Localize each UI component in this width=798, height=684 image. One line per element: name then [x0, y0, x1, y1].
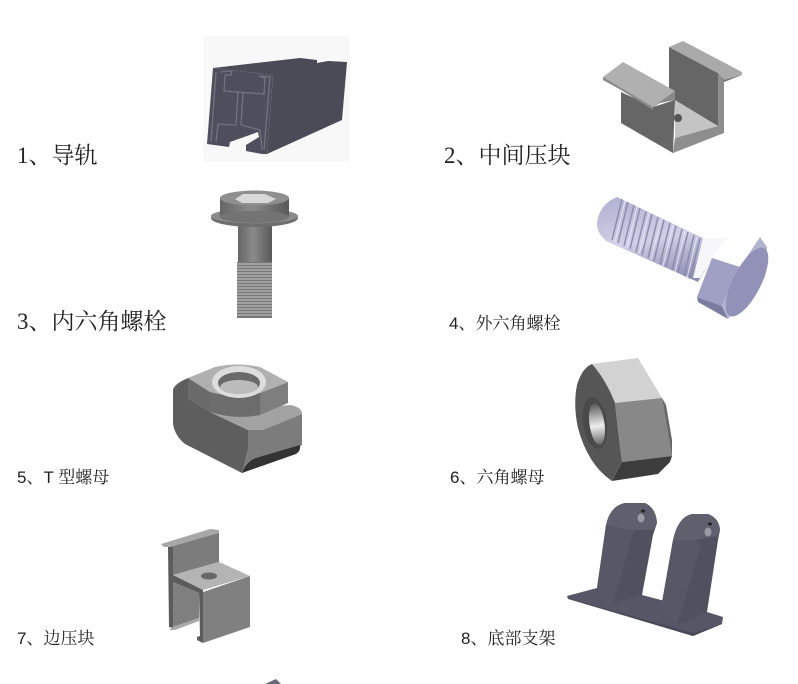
part image: cropped part at page bottom	[265, 679, 281, 684]
part image: rail	[203, 36, 350, 162]
label: 4 hex bolt: 4、外六角螺栓	[449, 314, 560, 333]
part image: hex bolt	[597, 197, 777, 322]
part image: edge clamp	[161, 529, 250, 643]
label: 8 bottom bracket: 8、底部支架	[461, 629, 555, 648]
part image: middle clamp	[603, 41, 742, 153]
label: 3 hex socket bolt: 3、内六角螺栓	[17, 309, 166, 334]
label: 7 edge clamp: 7、边压块	[17, 629, 94, 648]
label: 6 hex nut: 6、六角螺母	[450, 468, 544, 487]
part image: T nut	[173, 364, 302, 473]
label: 2 middle clamp: 2、中间压块	[444, 143, 570, 168]
label: 5 T nut: 5、T 型螺母	[17, 468, 109, 487]
part image: bottom bracket	[567, 503, 723, 636]
label: 1 rail: 1、导轨	[17, 143, 98, 168]
part image: hex nut	[575, 358, 672, 481]
part image: socket bolt	[211, 190, 298, 318]
